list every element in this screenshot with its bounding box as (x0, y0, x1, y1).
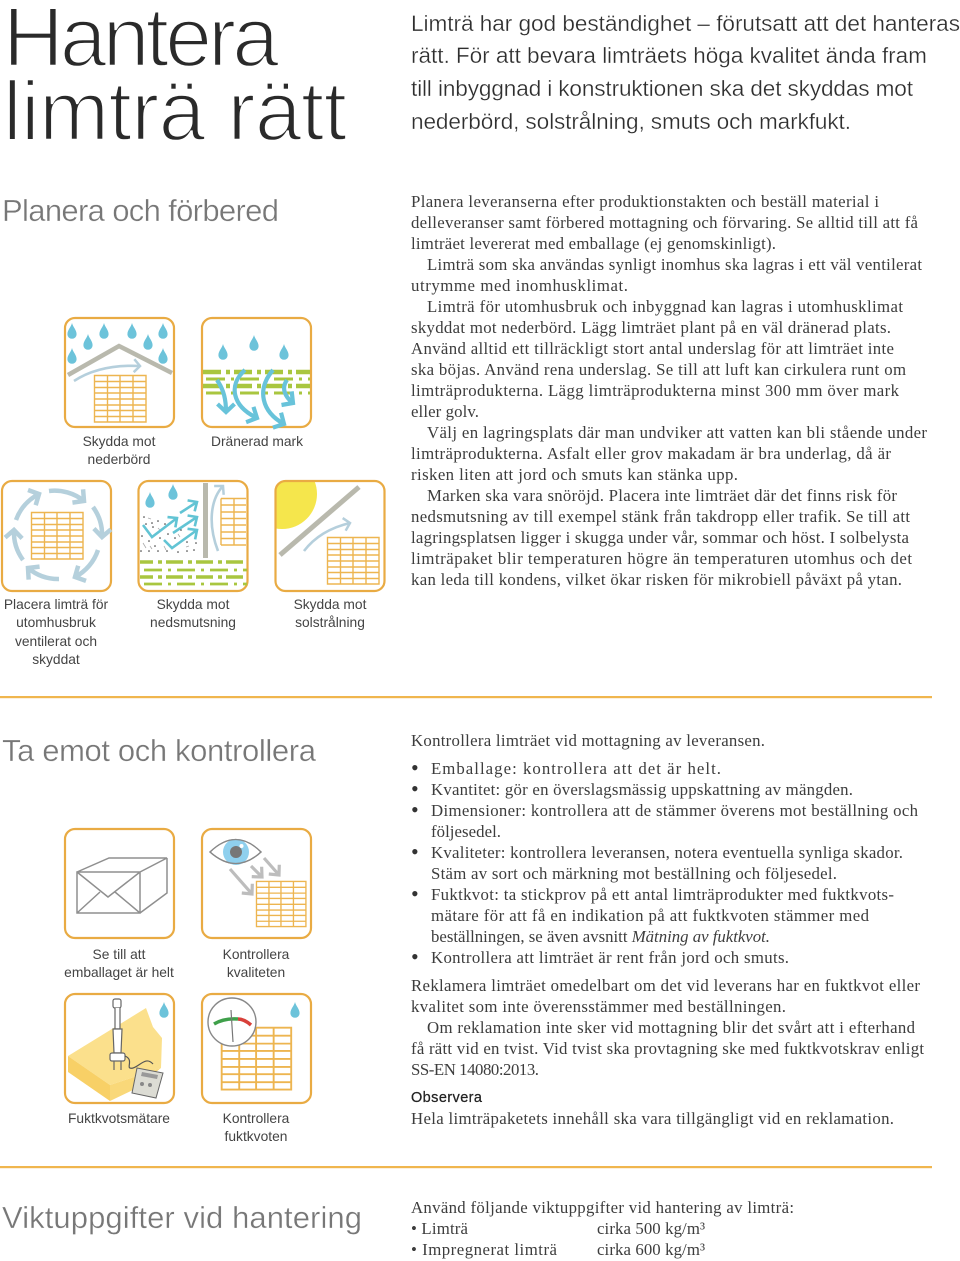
density table: • Limträ (411, 1219, 469, 1238)
label: Skydda mot solstrålning: Skydda mot (294, 597, 367, 612)
label: Se till att emballaget är helt (64, 947, 174, 980)
body text: Planera och förbered: limträprodukterna. Lägg limträprodukterna minst 300 mm över mark (411, 381, 900, 400)
callout: Observera: Observera (411, 1090, 483, 1106)
body text: Planera och förbered: nedsmutsning av till exempel stänk från takdropp eller trafik. Se till att (411, 507, 910, 526)
label: Skydda mot solstrålning: solstrålning (295, 615, 365, 630)
body text: Ta emot och kontrollera: • (411, 776, 419, 801)
body text: Planera och förbered: kan leda till kondens, vilket ökar risken för mikrobiell påväxt på ytan. (411, 570, 902, 589)
label: Placera limträ för utomhusbruk ventilerat och skyddat: utomhusbruk (16, 615, 96, 630)
body text: Ta emot och kontrollera: Kvaliteter: kontrollera leveransen, notera eventuella synliga skador. (431, 843, 903, 862)
label: Kontrollera kvaliteten (223, 947, 290, 980)
label: Skydda mot nederbörd (83, 434, 156, 467)
label: Skydda mot solstrålning (294, 597, 367, 630)
density table: cirka 500 kg/m³ (597, 1219, 705, 1238)
density table: Använd följande viktuppgifter vid hantering av limträ: (411, 1198, 794, 1217)
icon: moisture meter (65, 994, 174, 1103)
icon: check moisture content (202, 994, 311, 1103)
label: Kontrollera kvaliteten: kvaliteten (227, 965, 285, 980)
body text: Ta emot och kontrollera: få rätt vid en tvist. Vid tvist ska provtagning ske med fuktkvotskrav enligt (411, 1039, 924, 1058)
body text: Planera och förbered: Planera leveranserna efter produktionstakten och beställ material i (411, 192, 879, 211)
body text: Planera och förbered: risken liten att jord och smuts kan stänka upp. (411, 465, 738, 484)
label: Kontrollera kvaliteten: Kontrollera (223, 947, 290, 962)
body text: Ta emot och kontrollera: Kvantitet: gör en överslagsmässig uppskattning av mängden. (431, 780, 853, 799)
body text: Ta emot och kontrollera: Fuktkvot: ta stickprov på ett antal limträprodukter med fuktkvots- (431, 885, 894, 904)
icon: protect from dirt (138, 481, 248, 591)
title: limträ rätt (3, 64, 347, 158)
icon: protect from sunlight (274, 480, 386, 592)
intro text: Limträ har god beständighet – förutsatt att det hanteras (411, 11, 960, 36)
body text: Planera och förbered: limträprodukterna. Asfalt eller grov makadam är bra underlag, då är (411, 444, 891, 463)
body text: Planera och förbered: utrymme med inomhusklimat. (411, 276, 628, 295)
body text: Planera och förbered: Använd alltid ett tillräckligt stort antal underslag för att limträet inte (411, 339, 894, 358)
body text: Ta emot och kontrollera: följesedel. (431, 822, 501, 841)
label: Placera limträ för utomhusbruk ventilerat och skyddat: skyddat (32, 652, 80, 667)
intro text: nederbörd, solstrålning, smuts och markfukt. (411, 109, 851, 134)
heading: Planera och förbered: Planera och förbered (2, 193, 279, 228)
label: Se till att emballaget är helt: Se till att (93, 947, 146, 962)
body text: Planera och förbered: ska böjas. Använd rena underslag. Se till att luft kan cirkulera runt om (411, 360, 906, 379)
label: Skydda mot nederbörd: nederbörd (88, 452, 150, 467)
body text: Ta emot och kontrollera: mätare för att få en indikation på att fuktkvoten stämmer med (431, 906, 870, 925)
label: Skydda mot nedsmutsning: nedsmutsning (150, 615, 236, 630)
label: Skydda mot nederbörd: Skydda mot (83, 434, 156, 449)
icon: ventilated storage (2, 481, 111, 591)
body text: Planera och förbered (411, 192, 927, 589)
body text: Ta emot och kontrollera: Stäm av sort och märkning mot beställning och följesedel. (431, 864, 837, 883)
label: Skydda mot nedsmutsning: Skydda mot (157, 597, 230, 612)
icon: drained ground (202, 318, 311, 427)
heading: Viktuppgifter vid hantering: Viktuppgifter vid hantering (2, 1200, 362, 1235)
icon: check quality (202, 829, 311, 938)
callout: Observera: Hela limträpaketets innehåll ska vara tillgängligt vid en reklamation. (411, 1109, 894, 1128)
label: Fuktkvotsmätare: Fuktkvotsmätare (68, 1111, 170, 1126)
body text: Planera och förbered: limträet levererat med emballage (ej genomskinligt). (411, 234, 776, 253)
body text: Ta emot och kontrollera: beställningen, se även avsnitt Mätning av fuktkvot. (431, 927, 770, 946)
label: Placera limträ för utomhusbruk ventilerat och skyddat: Placera limträ för (4, 597, 109, 612)
label: Kontrollera fuktkvoten: Kontrollera (223, 1111, 290, 1126)
body text: Planera och förbered: limträpaket blir temperaturen högre än temperaturen utomhus och det (411, 549, 912, 568)
body text: Planera och förbered: Välj en lagringsplats där man undviker att vatten kan bli stående under (427, 423, 927, 442)
body text: Ta emot och kontrollera: • (411, 881, 419, 906)
label: Dränerad mark: Dränerad mark (211, 434, 303, 449)
body text: Ta emot och kontrollera: • (411, 797, 419, 822)
icon: protect from rain (65, 318, 174, 427)
body text: Ta emot och kontrollera (411, 731, 924, 1079)
icon: check packaging (65, 829, 174, 938)
body text: Ta emot och kontrollera: Kontrollera att limträet är rent från jord och smuts. (431, 948, 789, 967)
body text: Planera och förbered: eller golv. (411, 402, 479, 421)
intro text: till inbyggnad i konstruktionen ska det skyddas mot (411, 76, 914, 101)
body text: Planera och förbered: lagringsplatsen ligger i skugga under vår, sommar och höst. I solbelysta (411, 528, 910, 547)
body text: Planera och förbered: Limträ för utomhusbruk och inbyggnad kan lagras i utomhusklimat (427, 297, 903, 316)
body text: Ta emot och kontrollera: SS-EN 14080:2013. (411, 1060, 539, 1079)
body text: Ta emot och kontrollera: Kontrollera limträet vid mottagning av leveransen. (411, 731, 765, 750)
intro text: rätt. För att bevara limträets höga kvalitet ända fram (411, 43, 927, 68)
label: Placera limträ för utomhusbruk ventilerat och skyddat (4, 597, 109, 667)
body text: Ta emot och kontrollera: Om reklamation inte sker vid mottagning blir det svårt att i efterhand (427, 1018, 916, 1037)
body text: Planera och förbered: Marken ska vara snöröjd. Placera inte limträet där det finns risk för (427, 486, 897, 505)
body text: Ta emot och kontrollera: Reklamera limträet omedelbart om det vid leverans har en fuktkvot eller (411, 976, 920, 995)
body text: Planera och förbered: skyddat mot nederbörd. Lägg limträet plant på en väl dränerad plats. (411, 318, 891, 337)
body text: Ta emot och kontrollera: • (411, 839, 419, 864)
label: Kontrollera fuktkvoten: fuktkvoten (225, 1129, 287, 1144)
heading: Ta emot och kontrollera: Ta emot och kontrollera (2, 733, 317, 768)
body text: Planera och förbered: Limträ som ska användas synligt inomhus ska lagras i ett väl ventilerat (427, 255, 922, 274)
label: Kontrollera fuktkvoten (223, 1111, 290, 1144)
body text: Ta emot och kontrollera: • (411, 944, 419, 969)
density table (411, 1198, 794, 1259)
title (3, 0, 347, 158)
intro text (411, 11, 960, 134)
label: Skydda mot nedsmutsning (150, 597, 236, 630)
label: Placera limträ för utomhusbruk ventilerat och skyddat: ventilerat och (15, 634, 97, 649)
label: Se till att emballaget är helt: emballaget är helt (64, 965, 174, 980)
callout: Observera (411, 1090, 894, 1128)
body text: Ta emot och kontrollera: • (411, 755, 419, 780)
density table: • Impregnerat limträ (411, 1240, 558, 1259)
body text: Ta emot och kontrollera: kvalitet som inte överensstämmer med beställningen. (411, 997, 786, 1016)
body text: Ta emot och kontrollera: Dimensioner: kontrollera att de stämmer överens mot beställning och (431, 801, 919, 820)
density table: cirka 600 kg/m³ (597, 1240, 705, 1259)
body text: Ta emot och kontrollera: Emballage: kontrollera att det är helt. (431, 759, 721, 778)
body text: Planera och förbered: delleveranser samt förbered mottagning och förvaring. Se alltid till att få (411, 213, 919, 232)
